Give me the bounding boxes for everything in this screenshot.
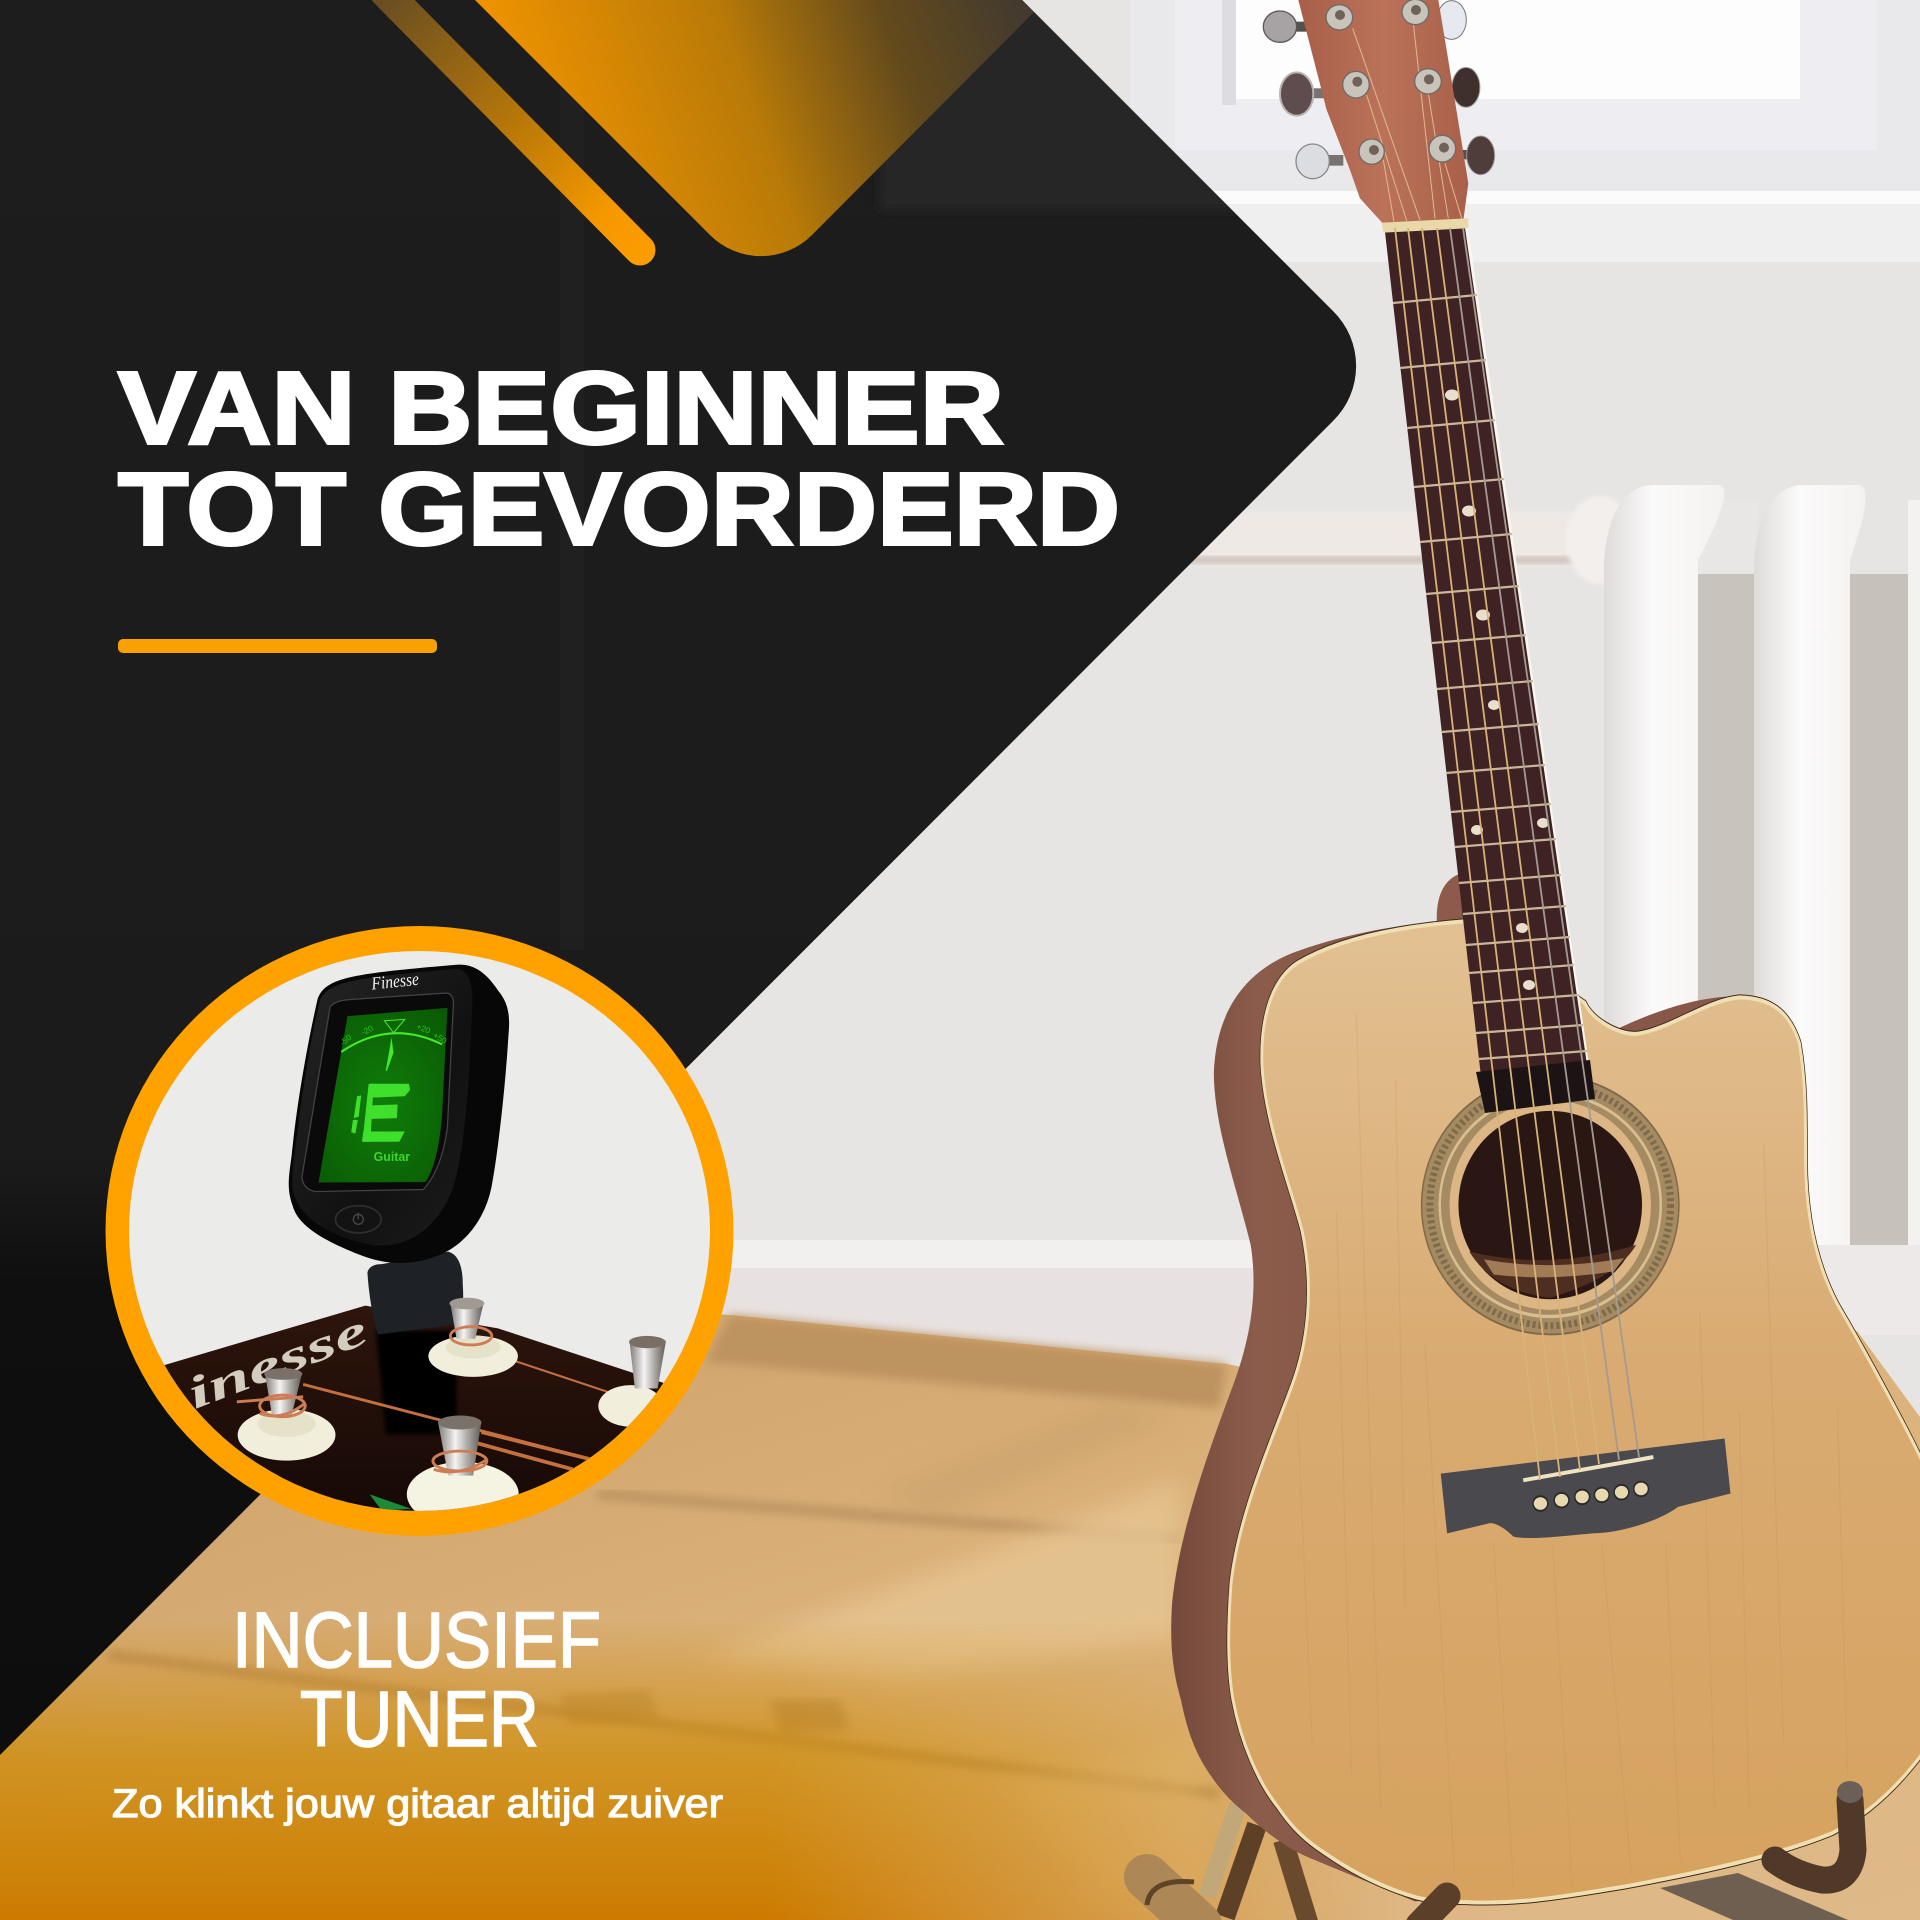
tuner label Guitar: Guitar <box>374 1149 410 1164</box>
tuner scale <box>341 1020 442 1052</box>
background: wall <box>0 0 1920 1500</box>
title underline <box>118 639 437 653</box>
tuner clip mount <box>367 1252 463 1335</box>
clip-on tuner: +20 <box>415 1021 432 1036</box>
rosette <box>1422 1076 1679 1334</box>
orange ring <box>106 926 734 1536</box>
tuner bezel <box>302 993 453 1192</box>
title <box>118 350 1120 566</box>
tuner brand Finesse: Finesse <box>369 969 420 994</box>
callout heading: INCLUSIEF <box>232 1595 601 1684</box>
tuner note E <box>351 1084 410 1142</box>
clip-on tuner <box>289 965 509 1263</box>
bridge <box>1441 1438 1730 1538</box>
title: TOT GEVORDERD <box>118 452 1120 566</box>
dark diagonal panel <box>0 0 1356 1755</box>
guitar body <box>1171 873 1920 1903</box>
tuner needle <box>386 1037 394 1071</box>
tuning pegs <box>1263 1 1495 179</box>
clip-on tuner: -20 <box>359 1023 375 1037</box>
photo <box>129 951 710 1511</box>
guitar stand: rear legs and rail <box>1147 1805 1848 1920</box>
machine heads <box>238 1298 666 1527</box>
tuner power button <box>335 1206 381 1233</box>
background: radiator <box>1180 485 1920 1335</box>
strings on plate <box>303 1347 647 1469</box>
clip-on tuner: +50 <box>432 1030 449 1046</box>
guitar top <box>1229 920 1920 1903</box>
fretboard <box>1385 228 1592 1112</box>
orange corner shape <box>475 0 1034 256</box>
orange diagonal stripe <box>385 0 640 250</box>
tuner screen <box>318 1008 447 1182</box>
callout subtitle: Zo klinkt jouw gitaar altijd zuiver <box>112 1782 723 1826</box>
headstock plate <box>164 1306 664 1511</box>
background: wooden floor <box>0 1305 1920 1920</box>
string posts <box>1326 0 1456 164</box>
orange glow at the bottom <box>0 1620 1400 1920</box>
inlay dots <box>1445 390 1549 990</box>
title: VAN BEGINNER <box>118 350 1004 466</box>
background: window <box>1130 0 1920 262</box>
clip-on tuner: -50 <box>338 1032 354 1048</box>
headstock logo: inesse <box>180 1304 374 1419</box>
guitar neck <box>1385 228 1595 1113</box>
guitar heel <box>1437 873 1480 925</box>
guitar side <box>1171 920 1739 1901</box>
tuner photo circle <box>100 920 750 1570</box>
panel: subtle background tones <box>560 0 1280 950</box>
headstock strings <box>1353 23 1462 222</box>
callout heading: TUNER <box>300 1674 539 1763</box>
guitar headstock <box>1263 0 1495 233</box>
guitar stand: front hooks <box>1419 1781 1863 1920</box>
tuner casing <box>289 965 509 1263</box>
callout heading <box>232 1595 601 1763</box>
nut <box>1382 218 1468 233</box>
guitar strings <box>1395 228 1639 1480</box>
green pick <box>369 1494 411 1511</box>
frets <box>1393 295 1587 1059</box>
background: skirting board <box>650 1240 1270 1358</box>
sound hole <box>1458 1111 1642 1299</box>
copper windings <box>237 1327 492 1472</box>
